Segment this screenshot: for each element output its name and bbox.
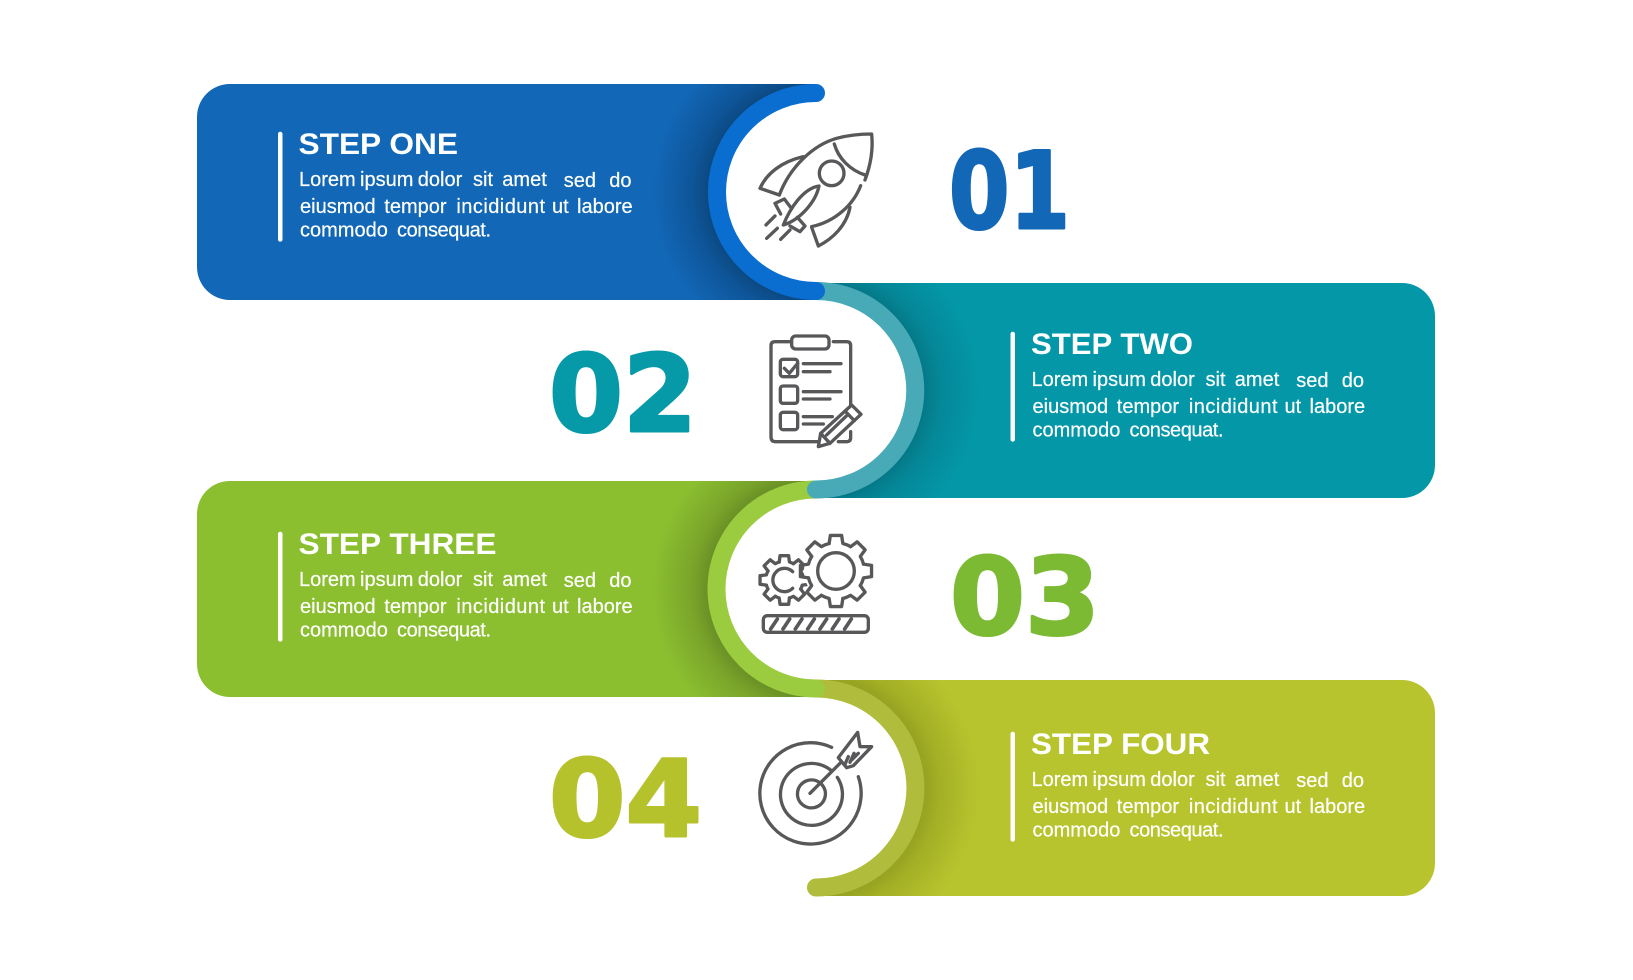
number 02: 02 bbox=[549, 333, 697, 456]
text: step two: sed bbox=[1296, 370, 1329, 392]
text: step two: tempor bbox=[1117, 396, 1179, 418]
text: step four: consequat. bbox=[1130, 820, 1224, 842]
icon: rocket bbox=[760, 134, 872, 246]
text: step three: amet bbox=[502, 569, 547, 591]
text: step four: ipsum bbox=[1092, 769, 1146, 791]
text: step four: labore bbox=[1310, 796, 1365, 818]
text: step one: do bbox=[609, 170, 632, 192]
text: step three: ipsum bbox=[360, 569, 413, 591]
text: step one: ipsum bbox=[360, 169, 413, 191]
text: step two: STEP TWO bbox=[1031, 328, 1193, 361]
text: step one: commodo bbox=[300, 220, 388, 242]
number 04: 04 bbox=[549, 738, 702, 861]
text: step three bbox=[278, 528, 633, 642]
text: step three: labore bbox=[577, 596, 633, 618]
text: step one: labore bbox=[577, 196, 633, 218]
text: step two: amet bbox=[1235, 369, 1280, 391]
text: step four: tempor bbox=[1117, 796, 1179, 818]
icon: gears with progress bar bbox=[760, 535, 872, 632]
text: step four: amet bbox=[1235, 769, 1280, 791]
text: step one: sed bbox=[564, 170, 596, 192]
text: step one: STEP ONE bbox=[298, 128, 458, 161]
text: step three: eiusmod bbox=[300, 596, 376, 618]
text: step two: ipsum bbox=[1092, 369, 1146, 391]
text: step one: Lorem bbox=[299, 169, 356, 191]
text: step three: Lorem bbox=[299, 569, 356, 591]
text: step two: commodo bbox=[1032, 420, 1120, 442]
text: step four: eiusmod bbox=[1032, 796, 1108, 818]
text: step one: dolor bbox=[418, 169, 463, 191]
text: step four: incididunt bbox=[1189, 796, 1278, 818]
text: step three: commodo bbox=[300, 620, 388, 642]
text: step four: commodo bbox=[1032, 820, 1120, 842]
panel: step two bbox=[816, 283, 1435, 498]
text: step two: incididunt bbox=[1189, 396, 1278, 418]
text: step one: eiusmod bbox=[300, 196, 376, 218]
text: step four: dolor bbox=[1150, 769, 1195, 791]
number 01: 01 bbox=[949, 130, 1070, 253]
text: step three: sed bbox=[564, 570, 596, 592]
icon: clipboard checklist bbox=[771, 336, 861, 447]
text: step four bbox=[1010, 728, 1365, 842]
text: step two: labore bbox=[1310, 396, 1365, 418]
text: step four: STEP FOUR bbox=[1031, 728, 1210, 761]
text: step three: ut bbox=[552, 596, 569, 618]
text: step two: ut bbox=[1284, 396, 1302, 418]
panel: step one bbox=[197, 84, 816, 300]
text: step four: Lorem bbox=[1032, 769, 1088, 791]
text: step two bbox=[1010, 328, 1365, 442]
text: step one: incididunt bbox=[456, 196, 545, 218]
icon: target with arrow bbox=[760, 732, 872, 844]
text: step two: dolor bbox=[1150, 369, 1195, 391]
text: step four: do bbox=[1342, 770, 1364, 792]
text: step one: amet bbox=[502, 169, 547, 191]
text: step four: sed bbox=[1296, 770, 1329, 792]
text: step two: Lorem bbox=[1032, 369, 1088, 391]
number 03: 03 bbox=[950, 536, 1100, 659]
text: step three: STEP THREE bbox=[298, 528, 496, 561]
text: step three: incididunt bbox=[456, 596, 545, 618]
text: step one: sit bbox=[473, 169, 493, 191]
text: step three: do bbox=[609, 570, 632, 592]
text: step one: ut bbox=[552, 196, 569, 218]
panel: step four bbox=[816, 680, 1435, 896]
text: step three: tempor bbox=[384, 596, 447, 618]
text: step three: sit bbox=[473, 569, 493, 591]
text: step three: consequat. bbox=[397, 620, 491, 642]
panel: step three bbox=[197, 481, 816, 697]
text: step two: eiusmod bbox=[1032, 396, 1108, 418]
text: step one: consequat. bbox=[397, 220, 491, 242]
text: step two: do bbox=[1342, 370, 1364, 392]
text: step one bbox=[278, 128, 633, 242]
text: step two: sit bbox=[1206, 369, 1226, 391]
text: step three: dolor bbox=[418, 569, 463, 591]
text: step four: ut bbox=[1284, 796, 1302, 818]
text: step two: consequat. bbox=[1130, 420, 1224, 442]
text: step four: sit bbox=[1206, 769, 1226, 791]
text: step one: tempor bbox=[384, 196, 447, 218]
